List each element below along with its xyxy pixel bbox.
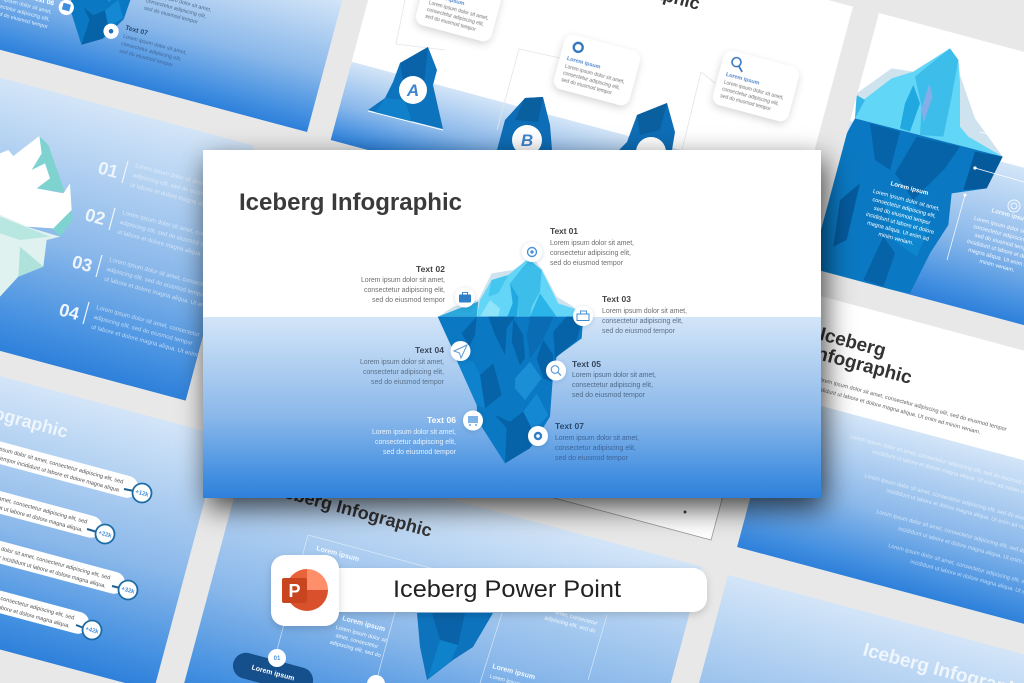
slide: bottom centre (180, 445, 702, 683)
number 03: 03 (70, 252, 94, 276)
iceberg C (619, 103, 675, 167)
slide: top right large iceberg (821, 13, 1024, 326)
slide: numbered list with white iceberg: Lorem ipsum dolor sit amet, consectetur (108, 257, 213, 291)
slide: bottom right (660, 575, 1024, 683)
text 07: Text 07 (555, 421, 584, 431)
pill 3 (0, 523, 128, 596)
value +42k: +42k (84, 626, 100, 636)
text 01: consectetur adipiscing elit, (550, 250, 631, 257)
text 02 (361, 264, 446, 304)
text 06: Lorem ipsum dolor sit amet, (372, 429, 456, 436)
text 07: consectetur adipiscing elit, (555, 445, 636, 452)
number 02: 02 (83, 205, 107, 229)
subtitle text: incididunt ut labore et dolore magna aliqua. Ut enim ad minim veniam. (812, 385, 981, 436)
pill 1 (0, 427, 141, 500)
slide: numbered list with white iceberg: Lorem ipsum dolor sit amet, consectetur (134, 163, 239, 197)
slide: numbered list with white iceberg: Lorem ipsum dolor sit amet, consectetur (121, 210, 226, 244)
slide: numbered list with white iceberg: ut labore et dolore magna aliqua. Ut enim (103, 276, 211, 311)
centre text on iceberg: Lorem ipsum (890, 180, 930, 197)
slide: top-left iceberg copy (0, 0, 375, 132)
text 06: Text 06 (427, 415, 456, 425)
subtitle text: Lorem ipsum dolor sit amet, consectetur adipiscing elit, sed do eiusmod tempor (816, 376, 1007, 433)
text 03: Text 03 (602, 294, 631, 304)
slide: numbered list with white iceberg: adipiscing elit, sed do eiusmod tempor (132, 173, 232, 205)
iceberg B: B (521, 131, 533, 150)
text 04 (360, 345, 445, 386)
title: Iceberg Infographic (239, 189, 462, 216)
body text rows (849, 434, 1024, 610)
value +22k (96, 524, 114, 544)
icon: briefcase (455, 288, 475, 308)
centre text on iceberg: minim veniam. (878, 232, 914, 247)
text 01 (550, 226, 634, 267)
centre text on iceberg: consectetur adipiscing elit, (872, 197, 937, 220)
text 05: consectetur adipiscing elit, (572, 382, 653, 389)
heading: slide title: Iceberg Infographic (268, 478, 434, 541)
centre text on iceberg (861, 176, 944, 251)
slide: numbered list with white iceberg: adipiscing elit, sed do eiusmod tempor (93, 315, 193, 347)
slide: numbered list with white iceberg (0, 24, 254, 401)
icon: magnifier (546, 360, 566, 380)
text block centre: Lorem ipsum (491, 663, 536, 681)
text block left: adipiscing elit, sed do (329, 640, 381, 659)
iceberg (438, 257, 583, 463)
card 3 (711, 49, 801, 123)
slide: right title and text (737, 292, 1024, 669)
card 2: sed do eiusmod tempor (560, 77, 613, 97)
slide: numbered list with white iceberg: Lorem ipsum dolor sit amet, consectetur (95, 305, 200, 339)
icon: paper plane (450, 341, 470, 361)
text 02: Text 02 (416, 264, 445, 274)
iceberg B (497, 97, 552, 155)
iceberg large (807, 48, 1003, 293)
slide: top-left iceberg copy: Text 07 (124, 25, 149, 37)
dark label pill: Lorem ipsum (251, 664, 295, 683)
text 05: Text 05 (572, 359, 601, 369)
text 03 (602, 294, 687, 335)
marker 01: 01 (274, 656, 281, 662)
icon: white iceberg (0, 136, 73, 297)
card 2: Lorem ipsum (566, 56, 601, 71)
slide: hidden white slide corner (257, 163, 779, 540)
text 01: Text 01 (550, 226, 578, 236)
slide: top-left iceberg copy: Lorem ipsum dolor sit amet, (122, 34, 187, 56)
pill 4 (0, 563, 92, 636)
heading: iceberg infographic two lines: Iceberg (817, 324, 888, 362)
card 1: sed do eiusmod tempor (424, 14, 477, 33)
slide: numbered list with white iceberg: adipiscing elit, sed do eiusmod tempor (119, 220, 219, 252)
text block left: Lorem ipsum dolor sit (335, 625, 388, 644)
iceberg A: A (406, 81, 419, 100)
icon: cart (463, 410, 483, 430)
pill 2 (0, 467, 105, 540)
card 1: Lorem ipsum dolor sit amet, (428, 0, 489, 22)
text 06: consectetur adipiscing elit, (375, 439, 456, 446)
card 2: consectetur adipiscing elit, (562, 70, 620, 91)
card 3: consectetur adipiscing elit, (721, 86, 779, 107)
text block right (544, 608, 598, 635)
value +12k: +12k (134, 489, 150, 499)
text 06: sed do eiusmod tempor (383, 449, 457, 456)
dark label pill (230, 650, 316, 683)
text 04: Lorem ipsum dolor sit amet, (360, 359, 444, 366)
slide: numbered list with white iceberg: ut labore et dolore magna aliqua. Ut enim (116, 229, 224, 264)
text 01: Lorem ipsum dolor sit amet, (550, 240, 634, 247)
text block left (329, 614, 391, 660)
card 1 (414, 0, 504, 43)
slide: top-left iceberg copy: sed do eiusmod tempor (118, 48, 174, 69)
marker 01 (268, 649, 286, 667)
text 01: sed do eiusmod tempor (550, 260, 624, 267)
water gradient (203, 317, 821, 498)
text 02: Lorem ipsum dolor sit amet, (361, 277, 445, 284)
badge pill: product name (320, 568, 707, 612)
text 03: consectetur adipiscing elit, (602, 318, 683, 325)
text block right: adipiscing elit, sed do (544, 615, 596, 635)
centre text on iceberg: sed do eiusmod tempor (873, 206, 931, 227)
text 07 (555, 421, 639, 462)
card 2: Lorem ipsum dolor sit amet, (564, 64, 625, 85)
badge pill: product name: Iceberg Power Point (393, 576, 621, 603)
marker 02 (367, 675, 385, 683)
number 01: 01 (96, 158, 120, 182)
right text block: minim veniam. (979, 259, 1015, 274)
value +32k: +32k (120, 586, 136, 596)
text 05: Lorem ipsum dolor sit amet, (572, 372, 656, 379)
card 3: sed do eiusmod tempor (719, 93, 772, 113)
value +22k: +22k (97, 530, 113, 540)
slide: top middle A B C (331, 0, 853, 262)
iceberg small (417, 613, 493, 680)
icon: PowerPoint logo tile (271, 555, 339, 626)
card 1: consectetur adipiscing elit, (426, 7, 484, 28)
icon: target (1008, 200, 1020, 212)
text 07: sed do eiusmod tempor (555, 455, 629, 462)
slide: pills with values (0, 314, 222, 683)
iceberg A (368, 47, 443, 130)
main slide background (203, 150, 821, 498)
centre text on iceberg: incididunt ut labore et dolore (865, 212, 935, 236)
text block left: amet, consectetur (335, 633, 379, 650)
slide: numbered list with white iceberg: ut labore et dolore magna aliqua. Ut enim (90, 324, 198, 359)
centre text on iceberg: Lorem ipsum dolor sit amet, (872, 189, 941, 213)
icon: gift card (573, 306, 593, 326)
label: lorem ipsum: Lorem ipsum (315, 545, 360, 563)
slide: numbered list with white iceberg: ut labore et dolore magna aliqua. Ut enim (129, 182, 237, 217)
text 04: consectetur adipiscing elit, (363, 369, 444, 376)
card 3: Lorem ipsum dolor sit amet, (723, 80, 784, 101)
number 04: 04 (57, 300, 81, 324)
text block left: Lorem ipsum (341, 615, 386, 633)
heading: iceberg infographic two lines: Infographic (809, 342, 915, 389)
text 02: sed do eiusmod tempor (372, 297, 446, 304)
text 03: Lorem ipsum dolor sit amet, (602, 308, 687, 315)
value +32k (118, 580, 138, 600)
value +12k (132, 484, 152, 502)
text 04: Text 04 (415, 345, 444, 355)
card 2 (552, 33, 642, 107)
slide: numbered list with white iceberg: adipiscing elit, sed do eiusmod tempor (106, 267, 206, 299)
icon: target (522, 242, 542, 262)
card 3: Lorem ipsum (725, 72, 760, 87)
text 02: consectetur adipiscing elit, (364, 287, 445, 294)
text 04: sed do eiusmod tempor (371, 379, 445, 386)
text 07: Lorem ipsum dolor sit amet, (555, 435, 639, 442)
text 05 (572, 359, 656, 399)
value +42k (82, 620, 102, 640)
icon: PowerPoint logo tile: P (288, 581, 301, 601)
text 05: sed do eiusmod tempor (572, 392, 646, 399)
slide: top-left iceberg copy: consectetur adipiscing elit, (120, 41, 182, 63)
slide: top-left iceberg copy: sed do eiusmod tempor (143, 5, 199, 26)
centre text on iceberg: magna aliqua. Ut enim ad (866, 220, 929, 243)
text block right: amet, consectetur (554, 610, 598, 627)
main slide (203, 150, 821, 498)
right text block (962, 203, 1024, 278)
text 06 (372, 415, 457, 456)
text 03: sed do eiusmod tempor (602, 328, 676, 335)
icon: gear (528, 426, 548, 446)
